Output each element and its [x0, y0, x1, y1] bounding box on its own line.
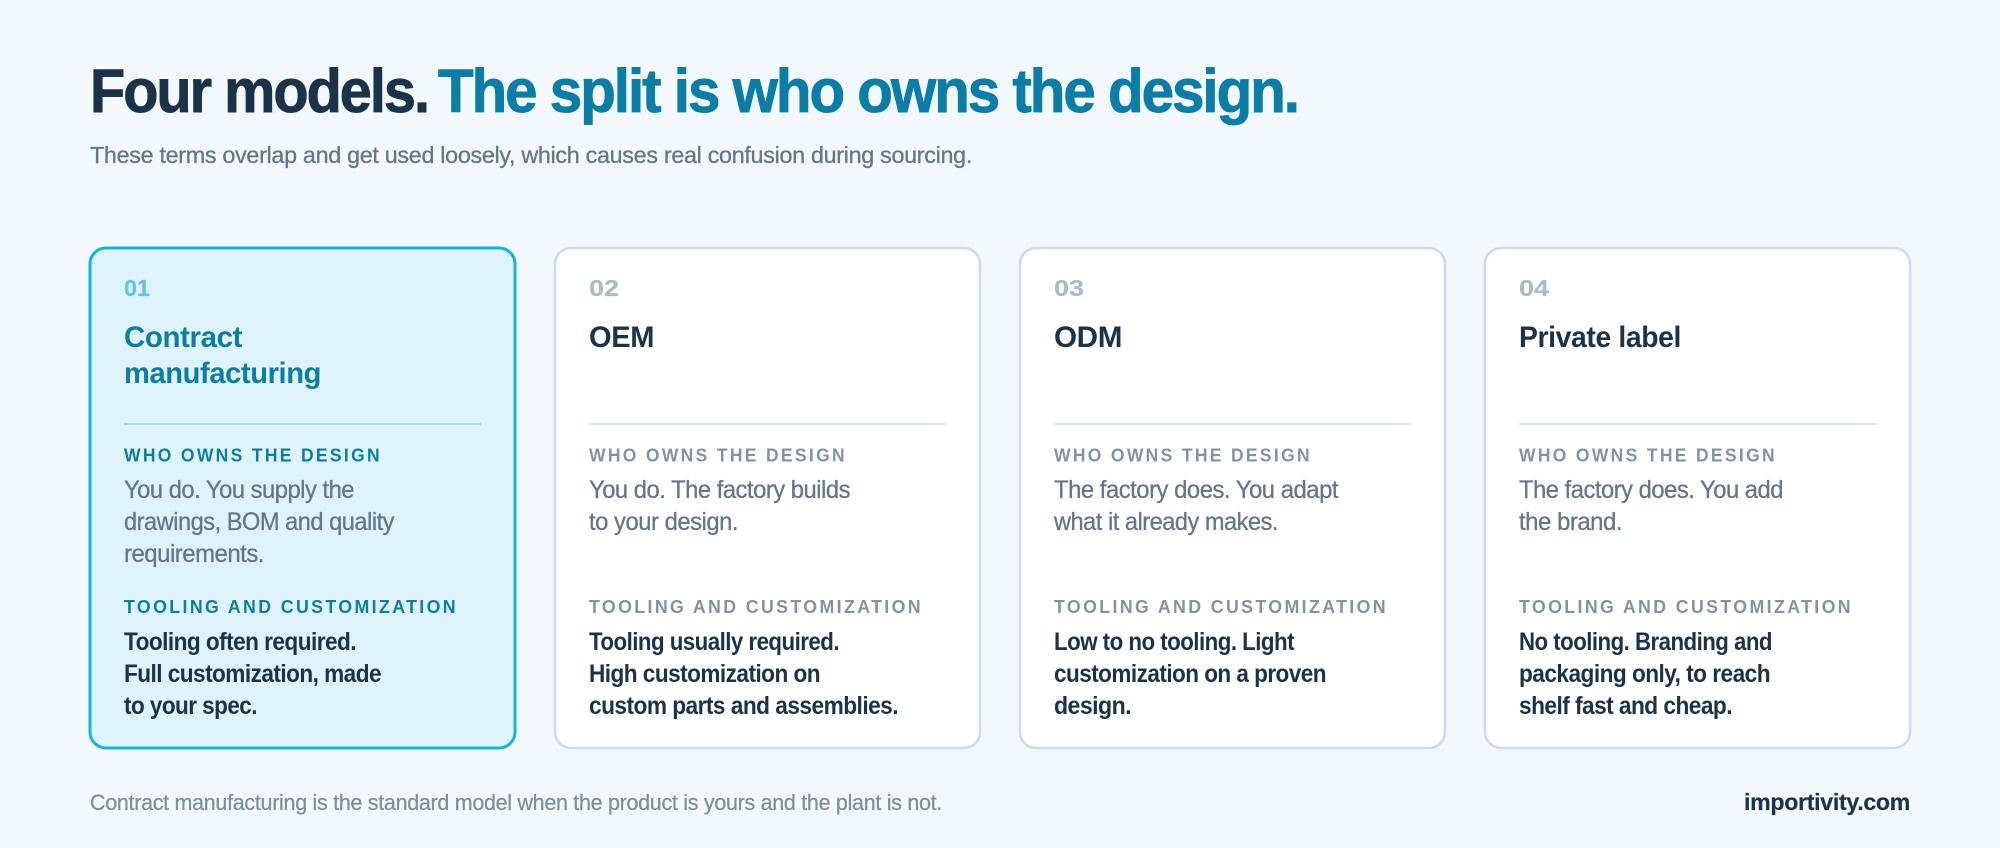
panel: ODM	[1020, 248, 1445, 748]
tooling and customization: No tooling. Branding and	[1519, 628, 1772, 656]
design ownership: to your design.	[589, 508, 738, 536]
tooling and customization: Tooling often required.	[124, 628, 356, 656]
title: Four models.	[90, 57, 428, 126]
panel: OEM	[555, 248, 980, 748]
design ownership: WHO OWNS THE DESIGN	[1054, 446, 1312, 466]
design ownership	[124, 446, 395, 568]
tooling and customization: Full customization, made	[124, 660, 382, 688]
title	[90, 57, 1298, 126]
number 02: 02	[589, 275, 619, 301]
tooling and customization: TOOLING AND CUSTOMIZATION	[1054, 597, 1388, 617]
design ownership: You do. The factory builds	[589, 476, 850, 504]
card heading: Contract	[124, 321, 242, 354]
design ownership: WHO OWNS THE DESIGN	[124, 446, 382, 466]
design ownership: The factory does. You adapt	[1054, 476, 1339, 504]
card heading	[124, 321, 321, 390]
design ownership	[589, 446, 850, 536]
design ownership: the brand.	[1519, 508, 1622, 536]
tooling and customization: custom parts and assemblies.	[589, 692, 898, 720]
design ownership: The factory does. You add	[1519, 476, 1783, 504]
design ownership: requirements.	[124, 540, 264, 568]
tooling and customization	[1519, 597, 1853, 720]
panel: private label	[1485, 248, 1910, 748]
design ownership: You do. You supply the	[124, 476, 354, 504]
card heading: Private label	[1519, 321, 1681, 354]
design ownership	[1519, 446, 1783, 536]
design ownership: what it already makes.	[1053, 508, 1278, 536]
title: The split is who owns the design.	[438, 57, 1298, 126]
design ownership	[1053, 446, 1339, 536]
tooling and customization: TOOLING AND CUSTOMIZATION	[1519, 597, 1853, 617]
panel: contract manufacturing	[90, 248, 515, 748]
tooling and customization: customization on a proven	[1054, 660, 1326, 688]
tooling and customization	[589, 597, 923, 720]
brand: importivity.com	[1744, 789, 1910, 815]
tooling and customization: packaging only, to reach	[1519, 660, 1770, 688]
tooling and customization: High customization on	[589, 660, 820, 688]
tooling and customization	[124, 597, 458, 720]
card heading: ODM	[1054, 321, 1122, 354]
design ownership: WHO OWNS THE DESIGN	[589, 446, 847, 466]
subtitle: These terms overlap and get used loosely, which causes real confusion during sourcing.	[90, 142, 972, 168]
tooling and customization: design.	[1054, 692, 1131, 720]
design ownership: drawings, BOM and quality	[124, 508, 395, 536]
tooling and customization: Low to no tooling. Light	[1054, 628, 1295, 656]
card heading: manufacturing	[124, 357, 321, 390]
design ownership: WHO OWNS THE DESIGN	[1519, 446, 1777, 466]
tooling and customization	[1054, 597, 1388, 720]
number 01: 01	[124, 275, 150, 301]
tooling and customization: shelf fast and cheap.	[1519, 692, 1732, 720]
tooling and customization: TOOLING AND CUSTOMIZATION	[589, 597, 923, 617]
number 03: 03	[1054, 275, 1084, 301]
tooling and customization: TOOLING AND CUSTOMIZATION	[124, 597, 458, 617]
footnote: Contract manufacturing is the standard model when the product is yours and the plant is not.	[90, 790, 942, 815]
number 04: 04	[1519, 275, 1549, 301]
card heading: OEM	[589, 321, 654, 354]
tooling and customization: to your spec.	[124, 692, 257, 720]
tooling and customization: Tooling usually required.	[589, 628, 839, 656]
